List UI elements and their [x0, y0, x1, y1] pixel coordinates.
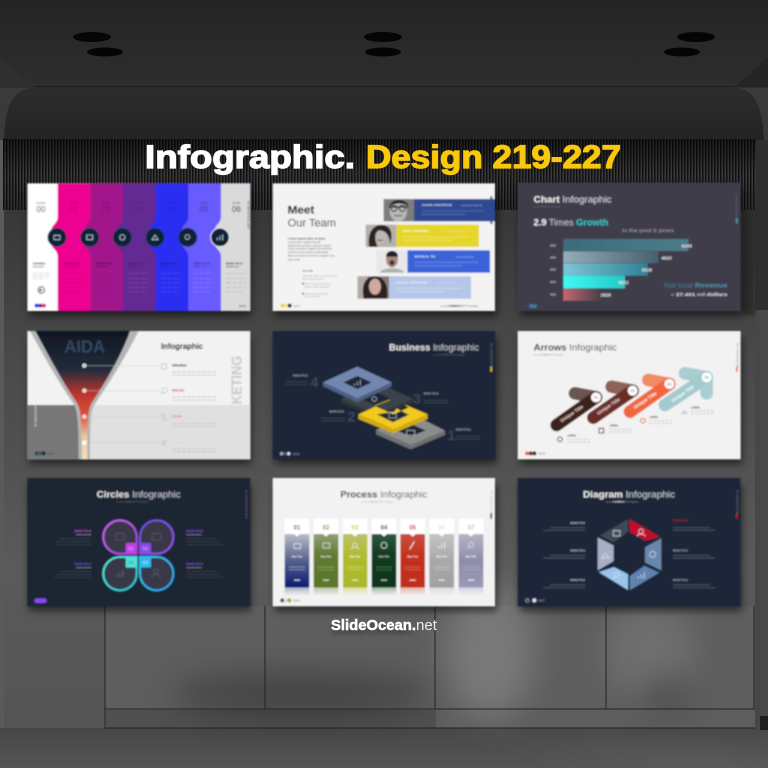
vertical brand label: SLIDEOCEAN.NET	[246, 201, 249, 230]
team row 4: Sophie Thompson: Lorem Ipsum Dolor	[438, 281, 456, 284]
bar chart: 2025	[550, 243, 556, 247]
cabinet panels and floor	[0, 580, 768, 768]
list: Ultricies purus lectus libero	[304, 292, 329, 295]
petal 4	[103, 557, 137, 590]
team row 1: Jason Anderson: JASON ANDERSON	[422, 203, 452, 207]
logo	[529, 304, 537, 308]
card 01: Main Title	[292, 556, 303, 559]
team row 4: Sophie Thompson: SOPHIE THOMPSON	[396, 280, 427, 284]
title: Infographic.	[145, 139, 355, 175]
heading: Chart Infographic	[534, 195, 612, 205]
panel: arrows slide 224	[518, 331, 741, 459]
panel: agenda slide 219: Subtitle here	[161, 266, 175, 269]
title: Design 219-227	[366, 139, 621, 175]
team row 1: Jason Anderson	[384, 196, 495, 224]
captions	[567, 407, 699, 438]
intro text: ultricies purus lectus malesuada	[288, 250, 329, 254]
logo and page number: #226	[293, 599, 300, 603]
step labels: 04	[167, 205, 177, 214]
panel: agenda slide 219: Subtitle here	[64, 266, 77, 269]
step titles and body text	[33, 261, 243, 265]
panel: business isometric slide 221: we sell COMMERCE PPT Templates	[433, 353, 466, 356]
hexagon diagram	[597, 519, 662, 591]
bar chart: 2024	[550, 255, 556, 259]
panel: agenda slide 219: Subtitle here	[96, 266, 110, 269]
item labels: MAIN TITLE	[186, 529, 203, 533]
card 05: Main Title	[407, 556, 419, 559]
isometric layer 1 grey	[376, 413, 445, 449]
logo dots: #220	[294, 304, 301, 308]
strip: step 05 violet	[181, 183, 250, 311]
panel: agenda slide 219: Subtitle here	[226, 266, 240, 269]
bar chart: 5528	[642, 268, 652, 273]
petal 4: 04	[128, 560, 134, 566]
arrow 1 dark brown	[557, 392, 601, 425]
vertical brand label	[735, 490, 738, 519]
step labels: STEP	[135, 201, 143, 205]
team row 4: Sophie Thompson	[358, 276, 471, 299]
petal 2: 02	[143, 546, 148, 552]
card 03	[343, 519, 367, 597]
AIDA heading: AIDA	[64, 336, 105, 356]
vertical brand label: SLIDEOCEAN	[490, 343, 493, 367]
right labels: MAIN TITLE	[673, 548, 688, 552]
step labels: MAIN TITLE	[329, 409, 344, 413]
panel: agenda slide 219: Infographic	[33, 266, 45, 269]
caption icons	[558, 410, 686, 442]
brand footer: SlideOcean.	[331, 621, 416, 638]
step numbers	[311, 374, 455, 443]
brand footer	[331, 617, 438, 638]
step labels: 06	[232, 205, 241, 214]
list	[302, 271, 337, 298]
petal 3	[140, 557, 173, 590]
card 04: 04	[381, 526, 388, 532]
step labels: START	[36, 201, 46, 205]
hexagon icons	[602, 529, 656, 579]
arrow 4 teal: Unique Title	[670, 384, 696, 403]
right labels: MAIN TITLE	[673, 519, 688, 523]
step labels: STEP	[200, 201, 208, 205]
panel: chart slide 225	[518, 183, 741, 311]
card 01: 01	[294, 526, 301, 532]
vertical brand label	[490, 343, 493, 372]
step titles and body text: MAIN TITLE	[226, 261, 243, 265]
card 05: 05	[409, 526, 417, 532]
captions: LOREM	[567, 436, 576, 438]
right labels: MAIN TITLE	[673, 578, 688, 582]
strip: step 03 purple	[115, 183, 250, 311]
isometric layer 3 dark	[341, 382, 413, 418]
stage labels: Action	[172, 440, 182, 444]
team row 1: Jason Anderson: Lorem Ipsum Dolor Sit	[461, 204, 483, 207]
list: sit amet commodo	[304, 295, 321, 298]
stage labels	[172, 363, 187, 444]
card 06	[429, 519, 454, 597]
brand footer: SlideOcean.	[331, 617, 416, 634]
logo and page number	[526, 598, 545, 603]
logo and page number	[280, 452, 300, 456]
stage labels: Interest	[172, 389, 185, 393]
isometric layer 4 blue	[323, 367, 392, 402]
connector lines and dots	[82, 364, 161, 445]
footer note: we sell COMMERCE PPT Templates	[440, 305, 479, 308]
left labels: MAIN TITLE	[570, 521, 586, 525]
logo and page number: #221	[293, 452, 300, 456]
card 03: Main Title	[350, 556, 361, 559]
heading	[288, 205, 336, 230]
vertical brand label	[490, 490, 493, 519]
heading: Diagram Infographic	[583, 489, 675, 499]
intro text	[288, 237, 335, 262]
heading: Circles Infographic	[97, 489, 181, 499]
petal 3: 03	[143, 560, 148, 566]
step titles and body text: MAIN TITLE	[96, 261, 113, 265]
captions: LOREM	[691, 407, 699, 409]
team row 2: Emily Martins: EMILY MARTINS	[403, 229, 428, 233]
bar chart	[550, 239, 692, 301]
right labels	[673, 519, 688, 582]
team row 3: Micheal Tei: Lorem Ipsum Dolor	[456, 255, 474, 258]
logo dots	[281, 304, 301, 308]
panel: process slide 226	[273, 478, 495, 606]
logo and page number: #224	[539, 452, 546, 456]
petal 1: 01	[128, 546, 134, 552]
list: Tools Skills	[302, 271, 314, 273]
bar chart: 2826	[601, 292, 611, 297]
logo and page number	[35, 451, 55, 456]
step labels	[293, 374, 471, 431]
team row 2: Emily Martins	[366, 225, 479, 247]
left labels: MAIN TITLE	[570, 578, 586, 582]
logo and page number: #227	[538, 599, 545, 603]
step labels: 03	[135, 205, 144, 214]
vertical brand label	[735, 343, 738, 372]
funnel	[30, 331, 139, 459]
heading: Our Team	[288, 218, 336, 230]
panel: process slide 226: we sell COMMERCE PPT Templates	[361, 500, 393, 503]
marketing word: KETING	[230, 356, 246, 404]
left labels	[570, 521, 586, 582]
intro text: quis urna	[288, 258, 300, 262]
card 02	[314, 519, 338, 597]
card 07: 07	[468, 526, 475, 532]
arrow 2 brown: 02	[631, 389, 635, 393]
card 04	[372, 519, 396, 597]
step labels: MAIN TITLE	[424, 391, 439, 395]
logo	[34, 598, 47, 603]
panel: circles slide 223: we sell COMMERCE PPT Templates	[116, 500, 148, 503]
stage text	[172, 372, 216, 452]
item labels: MAIN TITLE	[75, 562, 91, 566]
card reflections fade	[282, 588, 487, 598]
step labels: 01	[69, 205, 79, 214]
step numbers: 4	[311, 374, 319, 390]
arrow 3 orange: 03	[667, 382, 671, 386]
captions: LOREM	[609, 426, 618, 428]
intro text: Fusce posuere magna sed pulvinar	[288, 247, 332, 251]
captions: LOREM	[649, 417, 658, 419]
panel: agenda slide 219: Subtitle here	[129, 266, 142, 269]
card 07	[459, 519, 483, 597]
arrow 4 teal	[665, 372, 712, 405]
step numbers: 1	[447, 427, 455, 443]
arrow 1 dark brown: Unique Title	[559, 404, 585, 423]
heading: Meet	[288, 205, 315, 217]
bar chart: 2022	[550, 280, 556, 284]
step titles and body text: MAIN TITLE	[161, 261, 178, 265]
step titles and body text: MAIN TITLE	[64, 261, 80, 265]
step labels: 05	[200, 205, 209, 214]
icon: arrow button	[38, 287, 45, 293]
card 02: 02	[323, 526, 330, 532]
card 06: 06	[438, 526, 446, 532]
item labels: MAIN TITLE	[186, 562, 203, 566]
item text	[55, 535, 223, 577]
heading: Arrows Infographic	[534, 342, 617, 352]
panel: business isometric slide 221	[273, 331, 495, 459]
panel: chart slide 225: In the past 5 years	[622, 228, 675, 234]
card 03: 03	[352, 526, 359, 532]
panel: diagram slide 227: we sell COMMERCE PPT Templates	[606, 500, 638, 503]
step numbers: 3	[413, 391, 421, 407]
bar chart: 4620	[661, 255, 672, 260]
intro text: Lorem ipsum dolor sit amet	[288, 237, 325, 241]
step labels: STEP	[232, 201, 240, 205]
strip: step 01 pink	[50, 183, 250, 311]
stage labels: Desire	[172, 415, 182, 419]
panel: agenda slide 219	[27, 183, 250, 311]
brand footer: net	[416, 617, 438, 634]
panel: agenda slide 219: Subtitle here	[193, 266, 207, 269]
vertical brand label: SLIDEOCEAN	[735, 490, 738, 514]
arrow 2 brown	[593, 386, 638, 418]
bar chart: 6205	[682, 243, 692, 248]
strip: step 02 magenta	[83, 183, 250, 311]
title: Infographic	[161, 342, 204, 351]
logo and page number	[525, 451, 546, 456]
step labels: 00	[37, 205, 46, 214]
heading: Business Infographic	[389, 342, 479, 352]
panel: meet our team slide 220	[273, 183, 495, 311]
left labels: MAIN TITLE	[570, 548, 586, 552]
panel: chart slide 225: = 27.401 mil dollars	[671, 292, 728, 298]
step labels: STEP	[70, 201, 78, 205]
shadow under slides	[29, 190, 742, 611]
isometric layer 2 yellow	[358, 404, 428, 433]
logo dots	[35, 304, 46, 308]
step titles and body text: MAIN TITLE	[193, 261, 210, 265]
strip: step 06 grey	[213, 183, 250, 311]
petal 1	[103, 520, 137, 554]
icons	[160, 364, 167, 445]
step labels: 02	[102, 205, 111, 214]
page number: #219	[239, 304, 246, 308]
step labels	[36, 201, 241, 214]
panel: circles slide 223	[27, 478, 250, 606]
step labels: STEP	[168, 201, 176, 205]
heading: Process Infographic	[340, 489, 428, 499]
revenue callout: Net total Revenue	[664, 282, 728, 289]
intro text: Maecenas porttitor congue massa	[288, 243, 331, 247]
vertical brand label: SLIDEOCEAN	[490, 490, 493, 514]
team row 3: Micheal Tei: MICHEAL TEI	[415, 254, 436, 258]
step labels: MAIN TITLE	[456, 427, 471, 431]
card 01	[285, 519, 309, 597]
list: Lorem ipsum dolor sit amet consectetur	[302, 274, 337, 277]
arrow 2 brown: Unique Title	[596, 397, 621, 416]
vertical brand label: SLIDEOCEAN.NET	[35, 398, 38, 427]
title	[145, 139, 621, 175]
team row 2: Emily Martins: Lorem Ipsum Dolor	[447, 230, 466, 233]
item labels	[75, 529, 203, 566]
vertical brand label: SLIDEOCEAN	[735, 343, 738, 367]
subheading: 2.9 Times Growth	[534, 218, 608, 228]
logo and page number: #222	[48, 452, 55, 456]
arrow 3 orange: Unique Title	[633, 391, 658, 410]
card 02: Main Title	[321, 556, 332, 559]
petal 2	[140, 520, 173, 554]
stage labels: Attention	[172, 363, 187, 367]
side tag	[736, 195, 738, 223]
bar chart: 2021	[550, 292, 556, 296]
card 05	[400, 519, 425, 597]
item labels: MAIN TITLE	[75, 529, 91, 533]
card 06: Main Title	[436, 556, 448, 559]
intro text: libero sit amet commodo magna eros	[288, 253, 335, 257]
arrow 3 orange	[630, 379, 674, 412]
arrow 4 teal: 04	[705, 376, 709, 380]
list: Porttitor congue massa fusce	[304, 282, 331, 285]
bar chart: 4022	[618, 280, 629, 285]
step titles and body text: AGENDA	[33, 261, 46, 265]
step numbers: 2	[347, 409, 355, 425]
card 07: Main Title	[466, 556, 477, 559]
step titles and body text: MAIN TITLE	[129, 261, 145, 265]
logo and page number	[280, 598, 300, 603]
bar chart: 2023	[550, 268, 556, 272]
list: posuere magna sed pulvinar	[304, 286, 330, 289]
list: adipiscing elit maecenas	[302, 278, 324, 281]
card 04: Main Title	[379, 556, 390, 559]
intro text: consectetur adipiscing elit	[288, 240, 321, 244]
vertical brand label: SLIDEOCEAN.NET	[245, 490, 248, 519]
panel: diagram slide 227	[518, 478, 740, 606]
panel: chart slide 225: we sell COMMERCE PPT Templates	[534, 206, 561, 209]
team row 3: Micheal Tei	[376, 250, 490, 273]
arrow 1 dark brown: 01	[594, 396, 598, 400]
step labels: MAIN TITLE	[293, 374, 308, 378]
strip: step 04 blue	[148, 183, 250, 311]
step circles with icons	[48, 228, 229, 247]
panel: AIDA funnel slide 222	[27, 331, 250, 459]
step labels: STEP	[102, 201, 110, 205]
panel: arrows slide 224: we sell COMMERCE PPT Templates	[534, 353, 564, 356]
